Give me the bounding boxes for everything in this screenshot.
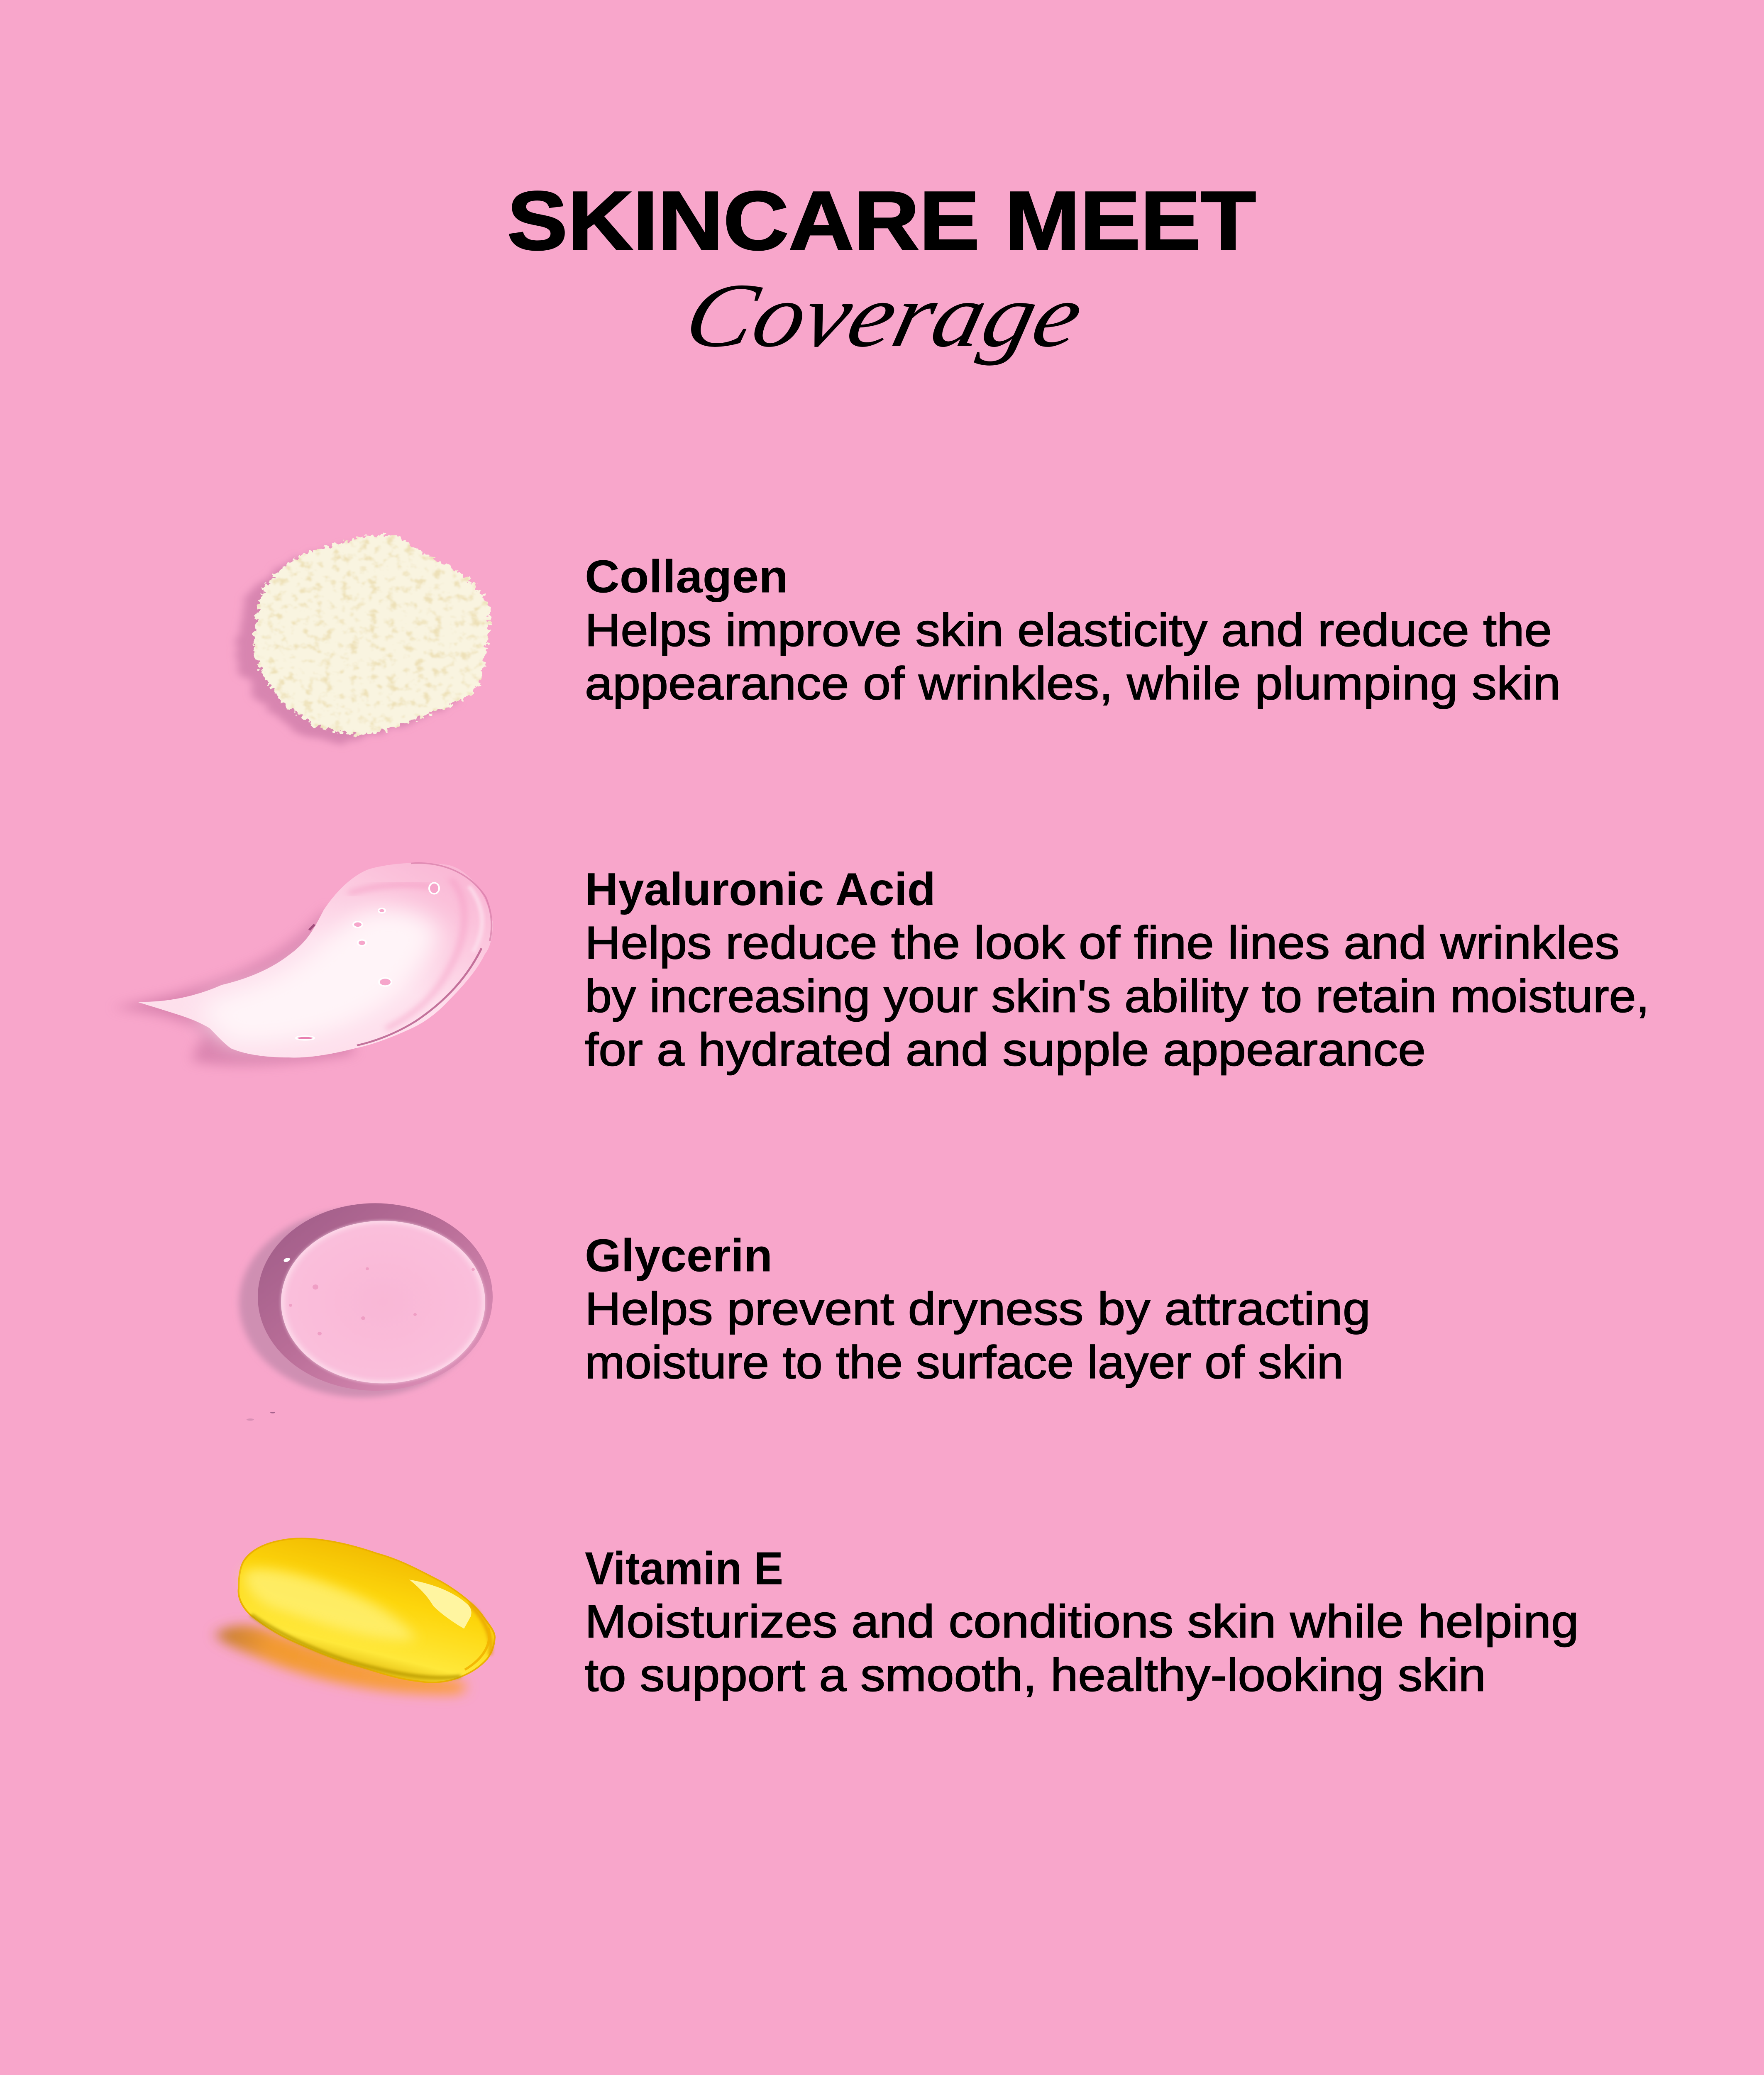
- panel: vitamin e: [216, 1538, 1579, 1701]
- description: Vitamin E: to support a smooth, healthy-looking skin: [585, 1649, 1486, 1701]
- description: Vitamin E: Moisturizes and conditions skin while helping: [585, 1596, 1579, 1648]
- faint speck: [247, 1418, 254, 1421]
- panel: collagen: [236, 535, 1561, 743]
- heading: SKINCARE MEET: SKINCARE MEET: [507, 174, 1256, 267]
- icon: glycerin droplet: [239, 1203, 493, 1421]
- title: [507, 174, 1256, 366]
- heading: Hyaluronic Acid: Hyaluronic Acid: [585, 864, 936, 915]
- description: Glycerin: moisture to the surface layer of skin: [585, 1337, 1344, 1388]
- icon: hyaluronic acid gel swipe: [113, 863, 493, 1065]
- description: Hyaluronic Acid: Helps reduce the look of fine lines and wrinkles: [585, 917, 1620, 969]
- description: Hyaluronic Acid: [585, 917, 1649, 1076]
- description: Hyaluronic Acid: for a hydrated and supple appearance: [585, 1024, 1426, 1076]
- heading: Collagen: Collagen: [585, 551, 788, 603]
- panel: hyaluronic acid: [113, 863, 1649, 1076]
- heading: Vitamin E: Vitamin E: [585, 1543, 783, 1594]
- icon: vitamin E softgel capsule: [216, 1538, 495, 1694]
- description: Collagen: Helps improve skin elasticity and reduce the: [585, 604, 1552, 656]
- description: Vitamin E: [585, 1596, 1579, 1701]
- icon: collagen powder: [236, 535, 489, 743]
- description: Glycerin: [585, 1283, 1371, 1388]
- heading: Glycerin: Glycerin: [585, 1230, 772, 1282]
- script heading: Coverage: Coverage: [676, 264, 1092, 366]
- panel: glycerin: [239, 1203, 1371, 1421]
- description: Glycerin: Helps prevent dryness by attracting: [585, 1283, 1371, 1335]
- speck: [270, 1412, 275, 1413]
- description: Collagen: [585, 604, 1561, 710]
- description: Hyaluronic Acid: by increasing your skin's ability to retain moisture,: [585, 971, 1649, 1022]
- description: Collagen: appearance of wrinkles, while plumping skin: [585, 658, 1561, 710]
